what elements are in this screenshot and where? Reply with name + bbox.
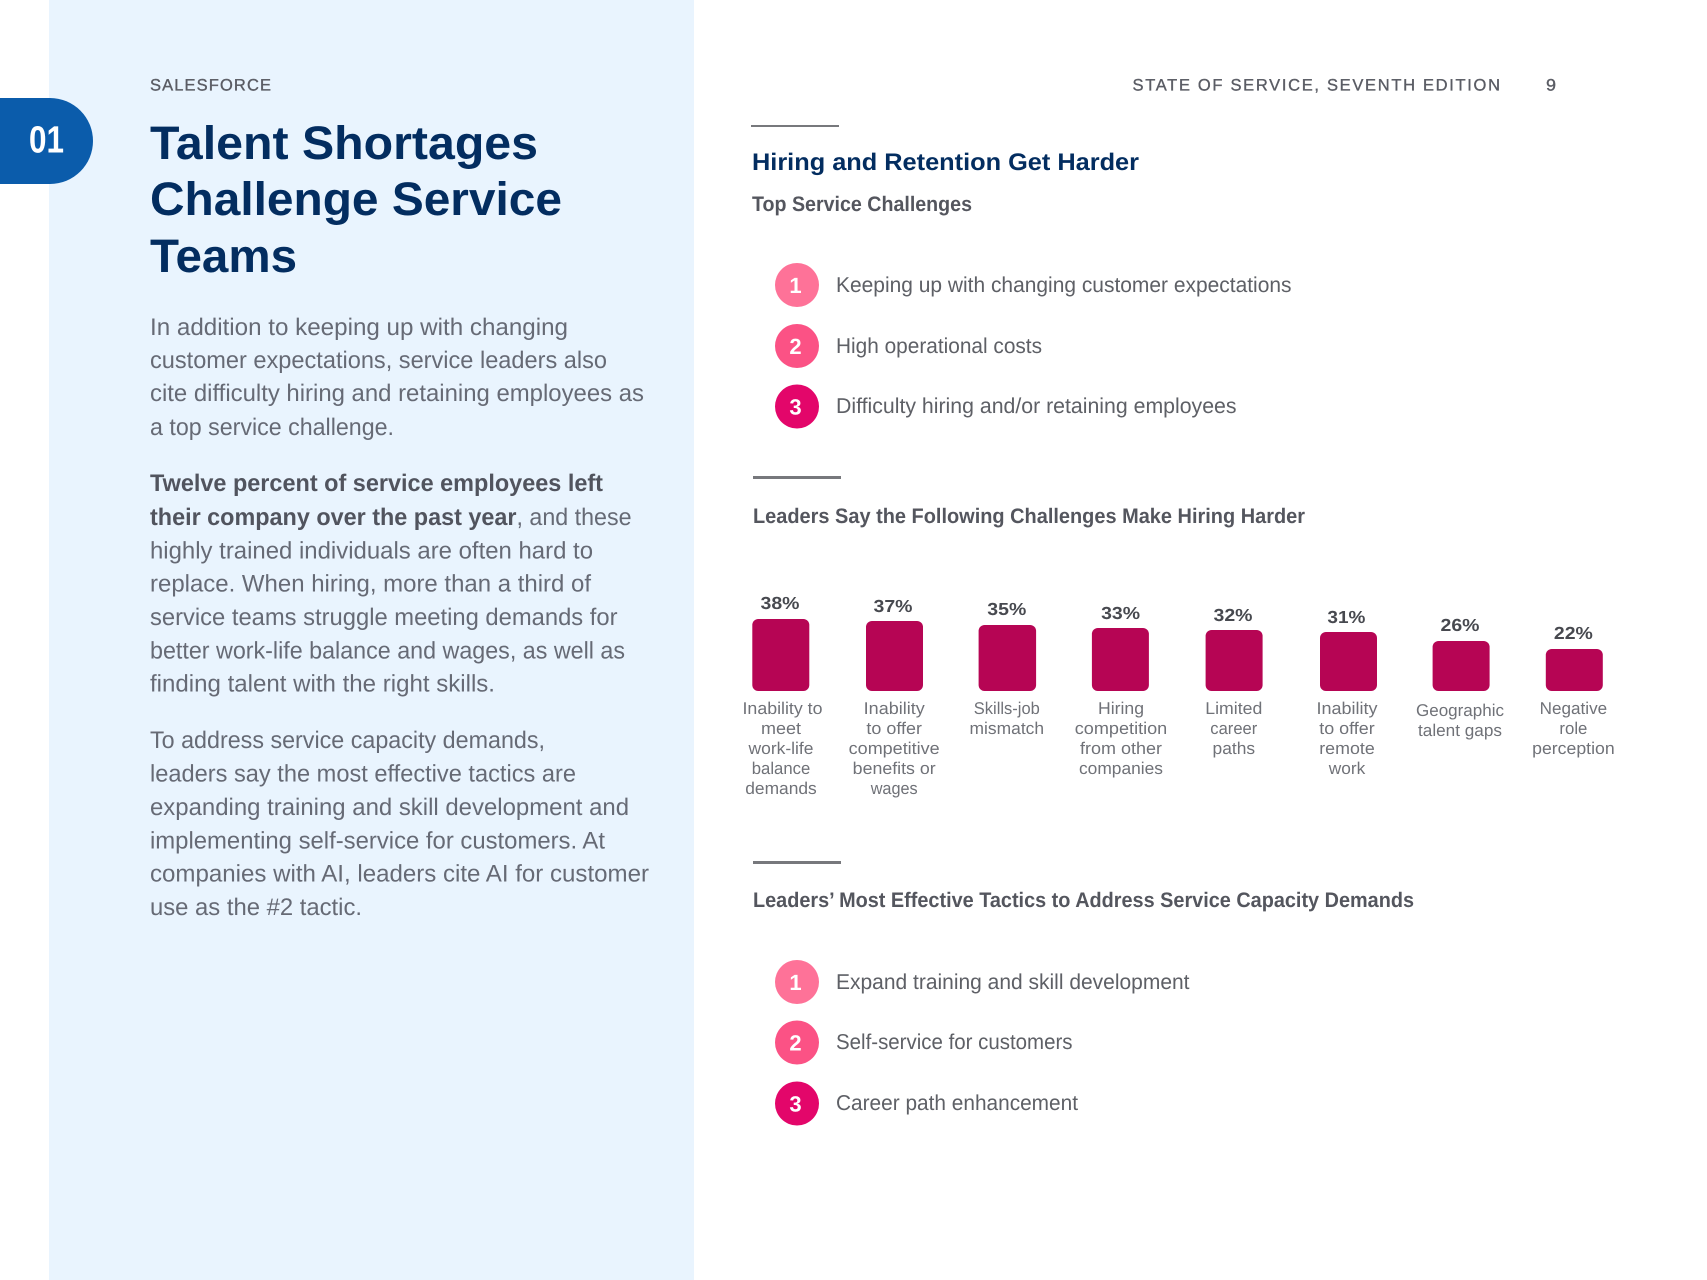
text block: tactics paragraph: expanding training and skill development and <box>150 794 629 821</box>
brand label: SALESFORCE <box>150 77 271 95</box>
bar 32%: 32% <box>1214 605 1253 625</box>
tactic 2: Self-service for customers <box>836 1030 1072 1054</box>
bar 32%: Limited <box>1205 699 1262 718</box>
bar 37%: to offer <box>866 719 922 738</box>
list item 2: 2 <box>789 334 802 359</box>
list item 2 <box>775 324 1042 368</box>
text block: intro paragraph <box>150 314 644 441</box>
text block: employee turnover paragraph: , and these <box>516 504 632 531</box>
title: Talent Shortages <box>150 116 538 169</box>
text block: employee turnover paragraph: highly trained individuals are often hard to <box>150 538 593 564</box>
tactic 1: Expand training and skill development <box>836 970 1190 994</box>
text block: tactics paragraph <box>150 727 649 921</box>
tactic 3 <box>775 1082 1078 1126</box>
subheading: hiring challenges: Leaders Say the Following Challenges Make Hiring Harder <box>753 505 1305 528</box>
bar 35%: Skills-job <box>974 699 1040 718</box>
bar 31%: to offer <box>1319 719 1375 738</box>
list item 3: Difficulty hiring and/or retaining employees <box>836 394 1236 418</box>
bar 38%: 38% <box>760 593 800 613</box>
bar 22%: 22% <box>1554 623 1593 643</box>
bar 32%: career <box>1210 719 1258 738</box>
bar 31%: Inability <box>1316 699 1378 718</box>
tactic 1: 1 <box>789 970 802 995</box>
text block: employee turnover paragraph: their company over the past year <box>150 504 516 531</box>
badge: section number 01: 01 <box>29 120 64 162</box>
bar 22%: role <box>1559 719 1587 738</box>
bar 37%: 37% <box>874 596 913 616</box>
bar 33% <box>1075 603 1167 778</box>
list item 3: 3 <box>789 394 802 420</box>
text block: tactics paragraph: implementing self-service for customers. At <box>150 828 605 854</box>
subheading: effective tactics: Leaders’ Most Effective Tactics to Address Service Capacity Demands <box>753 889 1414 912</box>
bar 26%: 26% <box>1440 615 1480 635</box>
text block: intro paragraph: In addition to keeping up with changing <box>150 314 568 341</box>
bar 32% <box>1205 605 1263 758</box>
bar 35%: 35% <box>987 599 1027 619</box>
bar 31%: work <box>1328 759 1366 778</box>
bar 37%: benefits or <box>853 759 936 778</box>
text block: tactics paragraph: companies with AI, leaders cite AI for customer <box>150 860 649 888</box>
bar 33%: from other <box>1080 739 1162 758</box>
subheading: top service challenges: Top Service Challenges <box>752 193 972 216</box>
bar 33%: competition <box>1075 719 1167 738</box>
badge: section number 01 <box>0 98 93 184</box>
tactic 3: 3 <box>789 1092 802 1116</box>
bar 32%: paths <box>1213 739 1255 758</box>
text block: employee turnover paragraph <box>150 470 632 698</box>
bar 33%: 33% <box>1101 603 1141 623</box>
list item 3 <box>775 384 1236 428</box>
bar 22%: Negative <box>1540 699 1607 718</box>
bar 33%: Hiring <box>1098 699 1144 718</box>
bar 31%: remote <box>1319 739 1375 758</box>
tactic 2 <box>775 1020 1072 1064</box>
bar 38%: balance <box>752 759 810 778</box>
bar 38%: demands <box>745 779 817 798</box>
text block: tactics paragraph: leaders say the most effective tactics are <box>150 760 576 788</box>
bar 38% <box>742 593 822 798</box>
bar 26%: Geographic <box>1416 701 1504 720</box>
tactic 2: 2 <box>789 1030 802 1056</box>
text block: tactics paragraph: use as the #2 tactic. <box>150 894 362 921</box>
text block: tactics paragraph: To address service capacity demands, <box>150 727 545 754</box>
bar 22%: perception <box>1532 739 1615 758</box>
ranked list: top service challenges <box>775 263 1292 428</box>
text block: intro paragraph: cite difficulty hiring and retaining employees as <box>150 380 644 407</box>
list item 1: Keeping up with changing customer expectations <box>836 273 1292 297</box>
bar 33%: companies <box>1079 759 1163 778</box>
text block: intro paragraph: a top service challenge. <box>150 414 394 441</box>
title <box>150 116 562 282</box>
heading: hiring and retention: Hiring and Retention Get Harder <box>752 149 1139 176</box>
title: Teams <box>150 229 297 282</box>
bar 31%: 31% <box>1327 607 1366 627</box>
bar 38%: Inability to <box>742 699 822 718</box>
bar 38%: work-life <box>747 739 814 758</box>
list item 1: 1 <box>789 273 802 298</box>
bar chart: hiring challenges <box>742 593 1615 798</box>
text block: employee turnover paragraph: Twelve percent of service employees left <box>150 470 603 497</box>
text block: employee turnover paragraph: service teams struggle meeting demands for <box>150 604 618 631</box>
ranked list: effective tactics <box>775 960 1190 1126</box>
title: Challenge Service <box>150 172 562 225</box>
bar 35%: mismatch <box>970 719 1044 738</box>
bar 35% <box>970 599 1044 738</box>
bar 26%: talent gaps <box>1418 721 1502 740</box>
text block: employee turnover paragraph: better work-life balance and wages, as well as <box>150 638 625 664</box>
bar 38%: meet <box>761 719 801 738</box>
bar 26% <box>1416 615 1504 740</box>
text block: intro paragraph: customer expectations, service leaders also <box>150 347 607 374</box>
list item 1 <box>775 263 1292 307</box>
bar 37% <box>849 596 940 798</box>
text block: employee turnover paragraph: finding talent with the right skills. <box>150 670 495 698</box>
list item 2: High operational costs <box>836 334 1042 358</box>
bar 31% <box>1316 607 1378 778</box>
bar 37%: wages <box>870 779 918 798</box>
page header: STATE OF SERVICE, SEVENTH EDITION <box>1132 77 1500 95</box>
bar 37%: competitive <box>849 739 940 758</box>
tactic 1 <box>775 960 1190 1004</box>
tactic 3: Career path enhancement <box>836 1091 1078 1115</box>
page header: 9 <box>1546 77 1556 95</box>
bar 37%: Inability <box>864 699 925 718</box>
text block: employee turnover paragraph: replace. When hiring, more than a third of <box>150 570 591 598</box>
bar 22% <box>1532 623 1615 758</box>
panel: left background <box>49 0 694 1280</box>
